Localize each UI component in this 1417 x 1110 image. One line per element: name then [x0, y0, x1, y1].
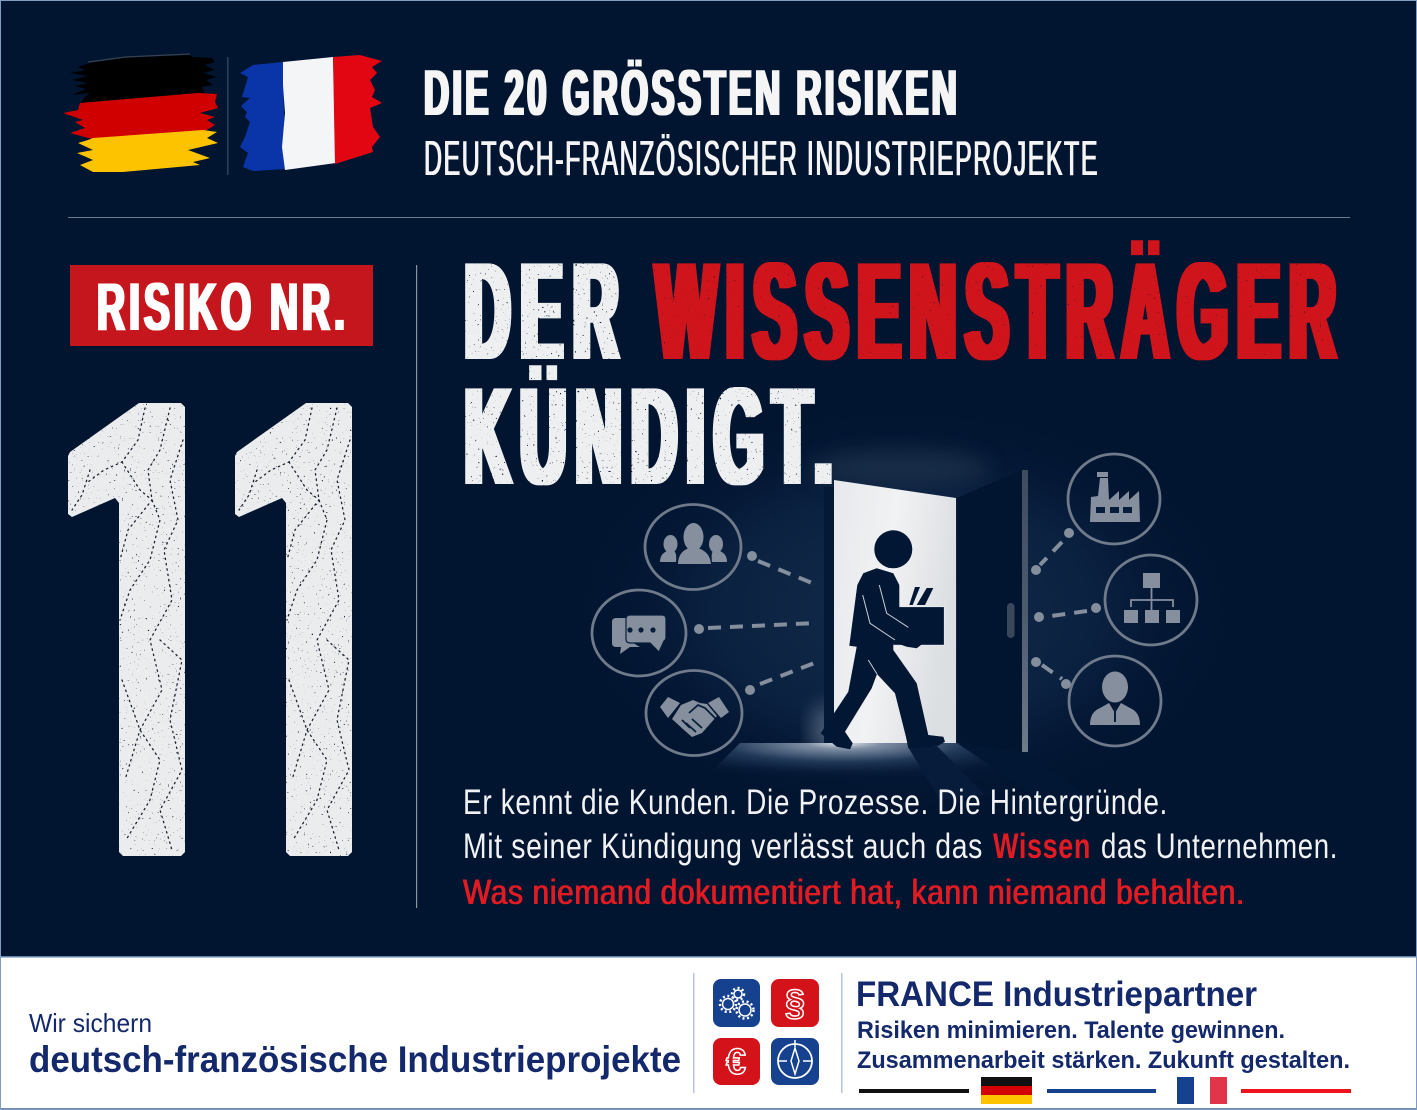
- panel: risk number: [68, 265, 373, 856]
- footer claim: [29, 1008, 681, 1080]
- icon: gears: [713, 979, 760, 1027]
- dashed knowledge links: [708, 542, 1087, 684]
- body copy: [463, 783, 1338, 912]
- badge: Risiko Nr.: [70, 265, 373, 346]
- door frame shadow: [824, 487, 835, 744]
- icon: paragraph sign: §: [785, 982, 805, 1023]
- icon: customers group: [645, 504, 741, 590]
- icon: factory: [1068, 454, 1160, 544]
- papers in box: [909, 587, 920, 605]
- glow at door base: [812, 704, 840, 756]
- icon: compass: [771, 1038, 819, 1085]
- icon: euro sign: [713, 1038, 760, 1085]
- body line 2: das Unternehmen.: [1101, 827, 1338, 866]
- icon: org chart: [1105, 555, 1197, 645]
- glow above door: [810, 450, 990, 486]
- header: [63, 54, 1099, 186]
- icon: euro sign: €: [726, 1041, 746, 1082]
- big number 11: 1: [207, 259, 397, 996]
- big number 11: [68, 403, 352, 856]
- arm outline: [863, 585, 908, 674]
- open door panel: [957, 470, 1028, 752]
- body line 3: Was niemand dokumentiert hat, kann niemand behalten.: [463, 873, 1245, 912]
- footer panel: [0, 956, 1417, 1110]
- icon: handshake: [646, 670, 742, 756]
- wall glow: [555, 395, 1255, 825]
- footer claim: deutsch-französische Industrieprojekte: [29, 1039, 681, 1080]
- figure head: [874, 530, 912, 568]
- icon: German brush flag: [63, 54, 218, 172]
- body line 2: Wissen: [993, 827, 1091, 866]
- badge: Risiko Nr.: RISIKO NR.: [97, 269, 349, 345]
- body line 1: Er kennt die Kunden. Die Prozesse. Die Hintergründe.: [463, 783, 1168, 822]
- headline: [465, 234, 1345, 514]
- icon: expert person: [1069, 656, 1161, 746]
- icon: French brush flag: [240, 55, 382, 171]
- icon: paragraph sign: [771, 979, 819, 1027]
- lit doorway: [834, 480, 956, 744]
- headline: KÜNDIGT.: [465, 359, 842, 514]
- headline: DER: [465, 234, 629, 389]
- icon: speech bubbles: [592, 590, 686, 676]
- title: DIE 20 GRÖSSTEN RISIKEN: [424, 56, 960, 129]
- big number 11: 1: [40, 259, 230, 996]
- divider between flags: [227, 57, 228, 175]
- footer tagline 1: Risiken minimieren. Talente gewinnen.: [857, 1017, 1285, 1044]
- illustration: employee leaving through door: [590, 444, 1198, 800]
- link end dots: [694, 528, 1101, 695]
- figure with box: [821, 530, 945, 749]
- footer claim: Wir sichern: [29, 1008, 152, 1038]
- footer tagline 2: Zusammenarbeit stärken. Zukunft gestalten.: [857, 1047, 1350, 1074]
- floor light: [720, 743, 984, 800]
- carton: [893, 607, 944, 645]
- figure body: [821, 568, 945, 749]
- footer brand: FRANCE Industriepartner: [856, 975, 1257, 1014]
- body line 2: Mit seiner Kündigung verlässt auch das: [463, 827, 983, 866]
- footer flag strip: [859, 1077, 1351, 1104]
